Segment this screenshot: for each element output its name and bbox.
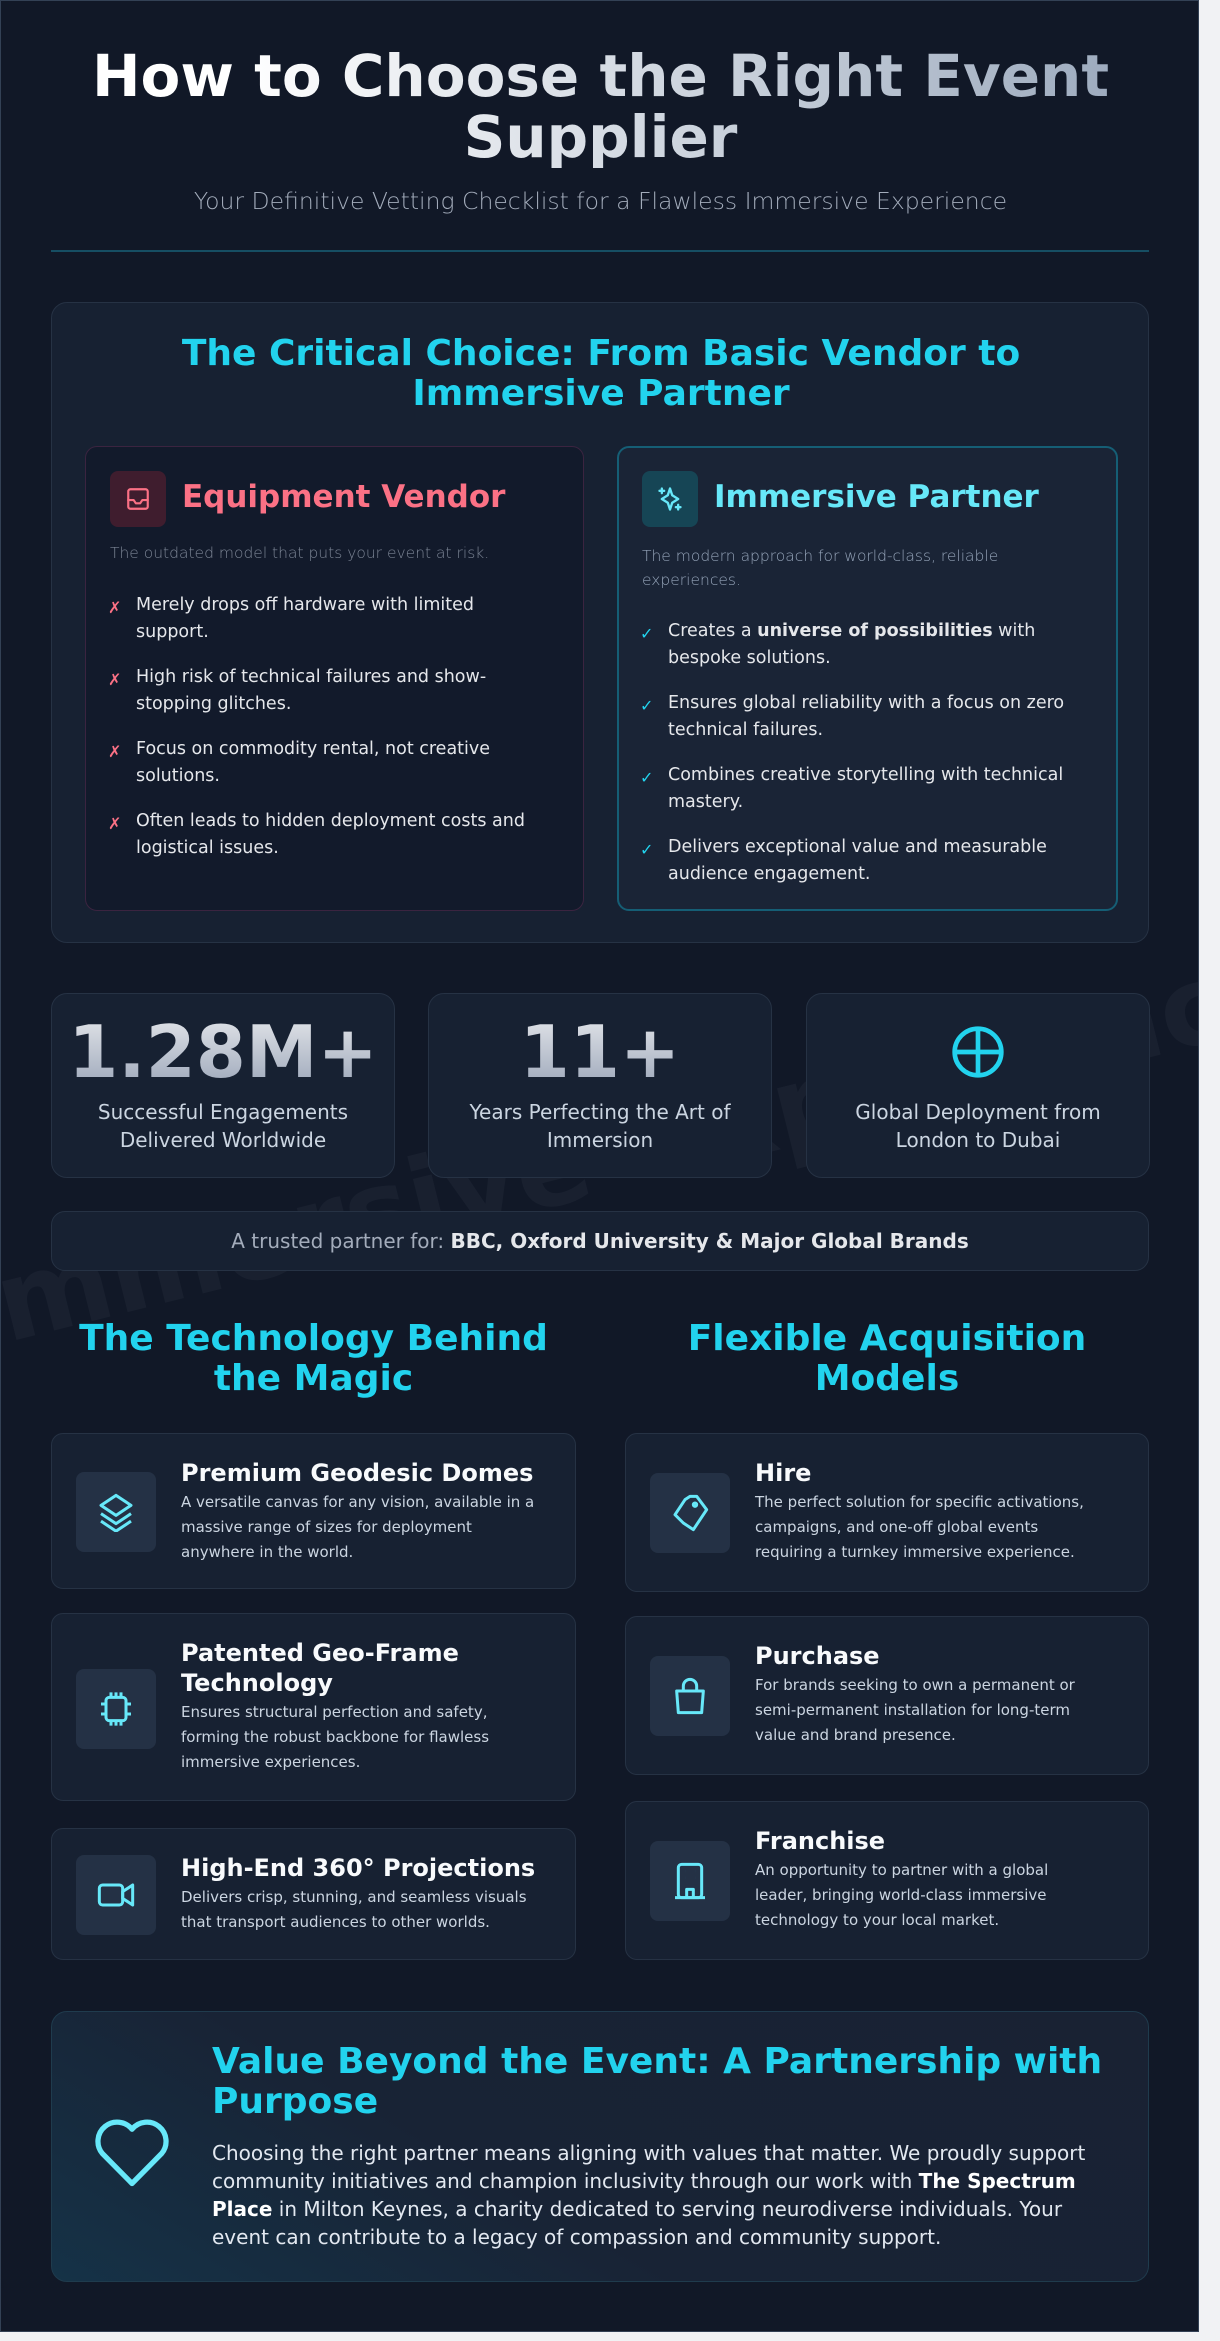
heading: critical choice [182, 333, 1020, 414]
stat: years: Immersion [547, 1128, 653, 1152]
card: geo-frame [51, 1613, 576, 1801]
card: projections: High-End 360° Projections [181, 1854, 535, 1882]
vendor list: ✗ [108, 598, 121, 617]
partner list: ✓ [640, 840, 653, 859]
card: domes: Premium Geodesic Domes [181, 1459, 533, 1487]
card: hire [625, 1433, 1149, 1592]
card: domes: A versatile canvas for any vision, available in a massive range of sizes for deployment anywhere in the world. [181, 1493, 534, 1561]
panel: critical choice [51, 302, 1149, 943]
card: projections: Delivers crisp, stunning, and seamless visuals that transport audiences to other worlds. [181, 1888, 527, 1931]
heading: value: Value Beyond the Event: A Partnership with Purpose [212, 2041, 1102, 2122]
heading: technology: The Technology Behind [79, 1318, 548, 1359]
partner list: ✓ [640, 696, 653, 715]
title: How to Choose the Right Event [92, 42, 1109, 110]
stat: engagements [51, 993, 395, 1178]
title: Supplier [464, 103, 737, 171]
card: geo-frame: Ensures structural perfection and safety, forming the robust backbone for flawless immersive experiences. [181, 1703, 489, 1771]
icon: inbox [110, 471, 166, 527]
card: geo-frame: Patented Geo-Frame Technology [181, 1639, 459, 1697]
icon: globe [952, 1026, 1004, 1078]
title [1, 46, 1200, 168]
stat: engagements: 1.28M+ [68, 1010, 378, 1094]
vendor list: Merely drops off hardware with limited support. [136, 595, 474, 642]
partner list: ✓ [640, 768, 653, 787]
heading: technology [79, 1318, 548, 1399]
partner subtitle: The modern approach for world-class, reliable experiences. [642, 547, 998, 589]
heading: acquisition [688, 1318, 1086, 1399]
vendor list: Often leads to hidden deployment costs and logistical issues. [136, 811, 525, 858]
partner title: Immersive Partner [714, 479, 1039, 515]
stat: global: Global Deployment from [855, 1100, 1101, 1124]
vendor list: ✗ [108, 814, 121, 833]
icon: heart [95, 2120, 169, 2186]
card: purchase: For brands seeking to own a permanent or semi-permanent installation for long-term value and brand presence. [755, 1676, 1075, 1744]
card: domes [51, 1433, 576, 1589]
panel: value beyond the event [51, 2011, 1149, 2282]
icon: bag [650, 1656, 730, 1736]
card: purchase: Purchase [755, 1642, 880, 1670]
card: purchase [625, 1616, 1149, 1775]
icon: tag [650, 1473, 730, 1553]
card: franchise: Franchise [755, 1827, 885, 1855]
heading: acquisition: Models [815, 1358, 959, 1399]
stat: years [428, 993, 772, 1178]
card: immersive partner [617, 446, 1118, 911]
card: hire: Hire [755, 1459, 811, 1487]
heading: technology: the Magic [214, 1358, 413, 1399]
vendor list: Focus on commodity rental, not creative solutions. [136, 739, 490, 786]
partner list [640, 621, 1064, 884]
icon: layers [76, 1472, 156, 1552]
card: equipment vendor [85, 446, 584, 911]
vendor list: ✗ [108, 742, 121, 761]
partner list: Ensures global reliability with a focus on zero technical failures. [668, 693, 1064, 740]
vendor subtitle: The outdated model that puts your event at risk. [110, 544, 489, 562]
trusted bar: A trusted partner for: BBC, Oxford University & Major Global Brands [231, 1229, 969, 1253]
stat: global: London to Dubai [896, 1128, 1060, 1152]
card: projections [51, 1828, 576, 1960]
partner list: Creates a universe of possibilities with bespoke solutions. [668, 621, 1035, 668]
text: value: Choosing the right partner means aligning with values that matter. We proudly support community initiatives and champion inclusivity through our work with The Spectrum Place in Milton Keynes, a charity dedicated to serving neurodiverse individuals. Your event can contribute to a legacy of compassion and community support. [212, 2141, 1085, 2249]
card: hire: The perfect solution for specific activations, campaigns, and one-off global events requiring a turnkey immersive experience. [755, 1493, 1084, 1561]
vendor list: High risk of technical failures and show-stopping glitches. [136, 667, 486, 714]
trusted bar [51, 1211, 1149, 1271]
vendor list: ✗ [108, 670, 121, 689]
stat: engagements: Successful Engagements [98, 1100, 348, 1124]
heading: critical choice: Immersive Partner [412, 373, 790, 414]
vendor title: Equipment Vendor [182, 479, 505, 515]
partner list: Combines creative storytelling with technical mastery. [668, 765, 1063, 812]
stat: engagements: Delivered Worldwide [120, 1128, 326, 1152]
stat: years: 11+ [520, 1010, 680, 1094]
partner list: ✓ [640, 624, 653, 643]
stat: years: Years Perfecting the Art of [469, 1100, 731, 1124]
subtitle: Your Definitive Vetting Checklist for a Flawless Immersive Experience [194, 187, 1007, 215]
card: franchise [625, 1801, 1149, 1960]
icon: sparkles [642, 471, 698, 527]
vendor list [108, 595, 525, 858]
partner list: Delivers exceptional value and measurable audience engagement. [668, 837, 1047, 884]
heading: acquisition: Flexible Acquisition [688, 1318, 1086, 1359]
heading: critical choice: The Critical Choice: From Basic Vendor to [182, 333, 1020, 374]
stat: global [806, 993, 1150, 1178]
icon: building [650, 1841, 730, 1921]
card: franchise: An opportunity to partner with a global leader, bringing world-class immersive technology to your local market. [755, 1861, 1048, 1929]
icon: video [76, 1855, 156, 1935]
icon: chip [76, 1669, 156, 1749]
